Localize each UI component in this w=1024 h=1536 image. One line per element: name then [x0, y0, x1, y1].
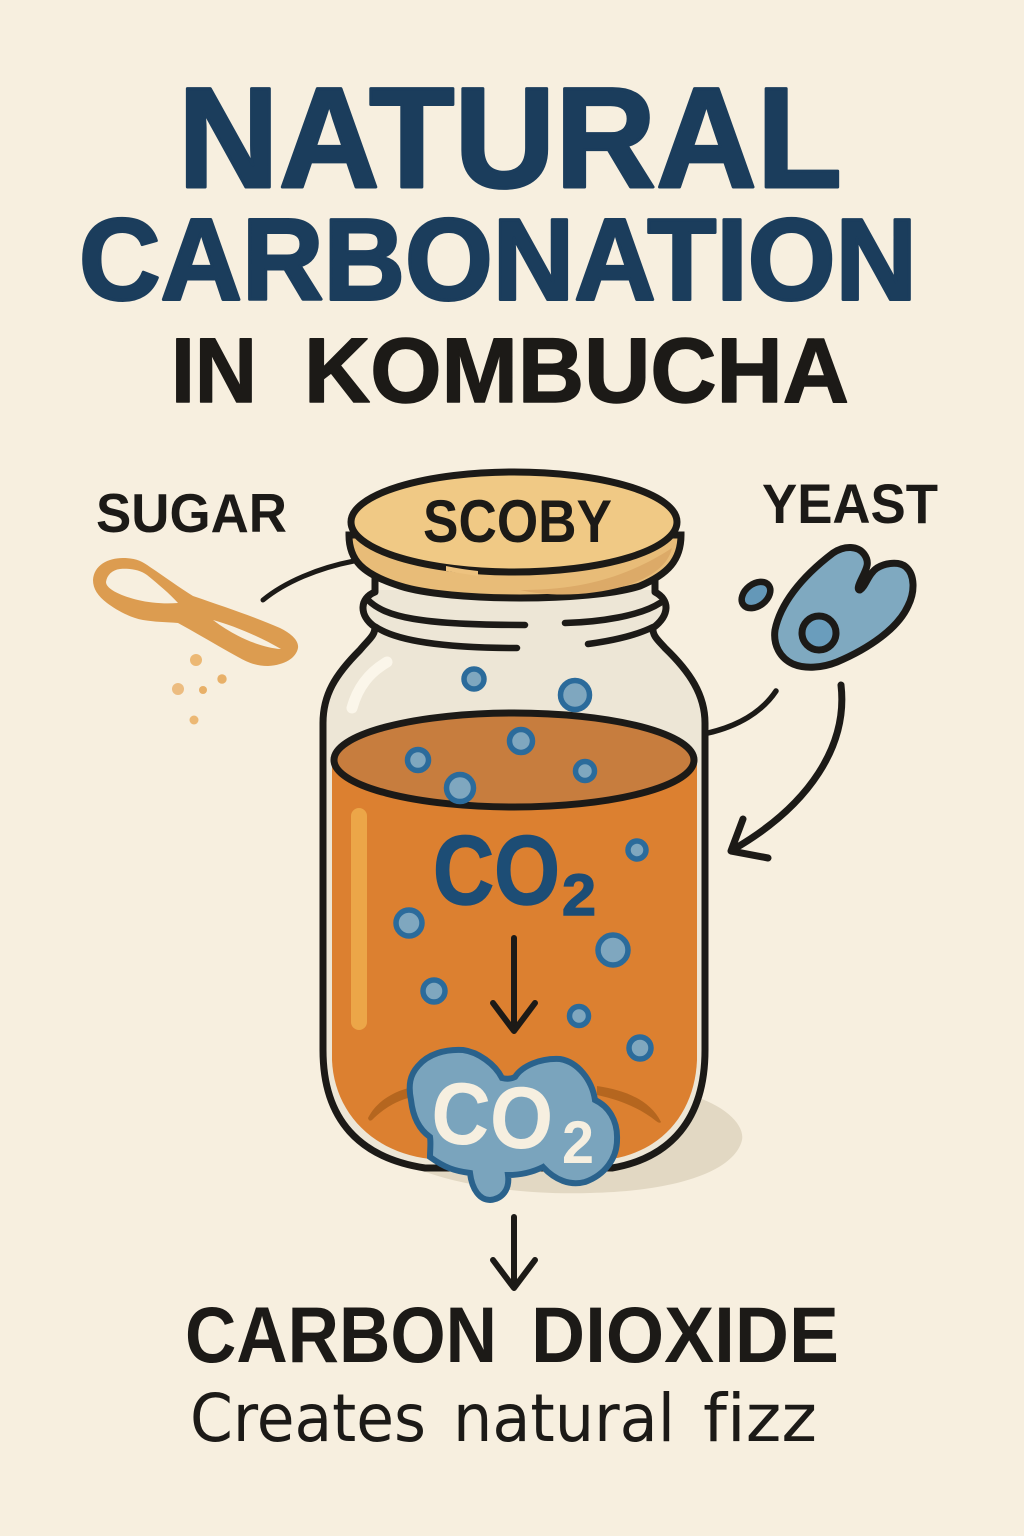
icon: yeast cell — [737, 547, 913, 667]
liquid highlight — [351, 808, 367, 1030]
arrow: yeast into jar — [731, 685, 842, 858]
connector: sugar to jar — [263, 561, 354, 600]
cloud: CO2: CO — [428, 1062, 557, 1169]
icon: sugar spoon — [93, 558, 298, 724]
shadow — [420, 1095, 742, 1193]
arrow: down in liquid — [493, 938, 535, 1031]
arrow: down to caption — [493, 1217, 535, 1288]
title: CARBONATION — [79, 194, 917, 324]
jar — [323, 472, 705, 1200]
jar glass — [323, 590, 705, 1168]
bubbles — [396, 669, 651, 1059]
heading: carbon dioxide: CARBON — [185, 1290, 497, 1379]
caption — [190, 1380, 817, 1457]
heading: carbon dioxide — [185, 1290, 839, 1379]
heading: carbon dioxide: DIOXIDE — [531, 1290, 839, 1379]
connector: yeast to jar — [708, 691, 776, 733]
liquid — [332, 760, 697, 1159]
neck threads — [368, 600, 660, 648]
caption: fizz — [703, 1380, 817, 1457]
title: KOMBUCHA — [304, 320, 849, 422]
sediment — [368, 1086, 661, 1123]
cloud: CO2: 2 — [562, 1109, 594, 1176]
title: NATURAL — [178, 59, 842, 218]
lid: scoby — [349, 472, 681, 598]
title: IN — [171, 320, 257, 422]
label: CO2 in liquid: 2 — [562, 863, 596, 928]
label: CO2 in liquid: CO — [433, 815, 560, 925]
caption: natural — [453, 1380, 675, 1457]
glass highlight — [352, 662, 387, 708]
caption: Creates — [190, 1380, 426, 1457]
jar outline — [323, 578, 705, 1168]
title — [79, 59, 917, 422]
cloud: CO2 — [410, 1050, 617, 1200]
label: sugar: SUGAR — [96, 482, 287, 544]
lid: scoby: SCOBY — [423, 488, 612, 555]
liquid surface — [334, 713, 694, 807]
label: yeast: YEAST — [762, 472, 938, 535]
